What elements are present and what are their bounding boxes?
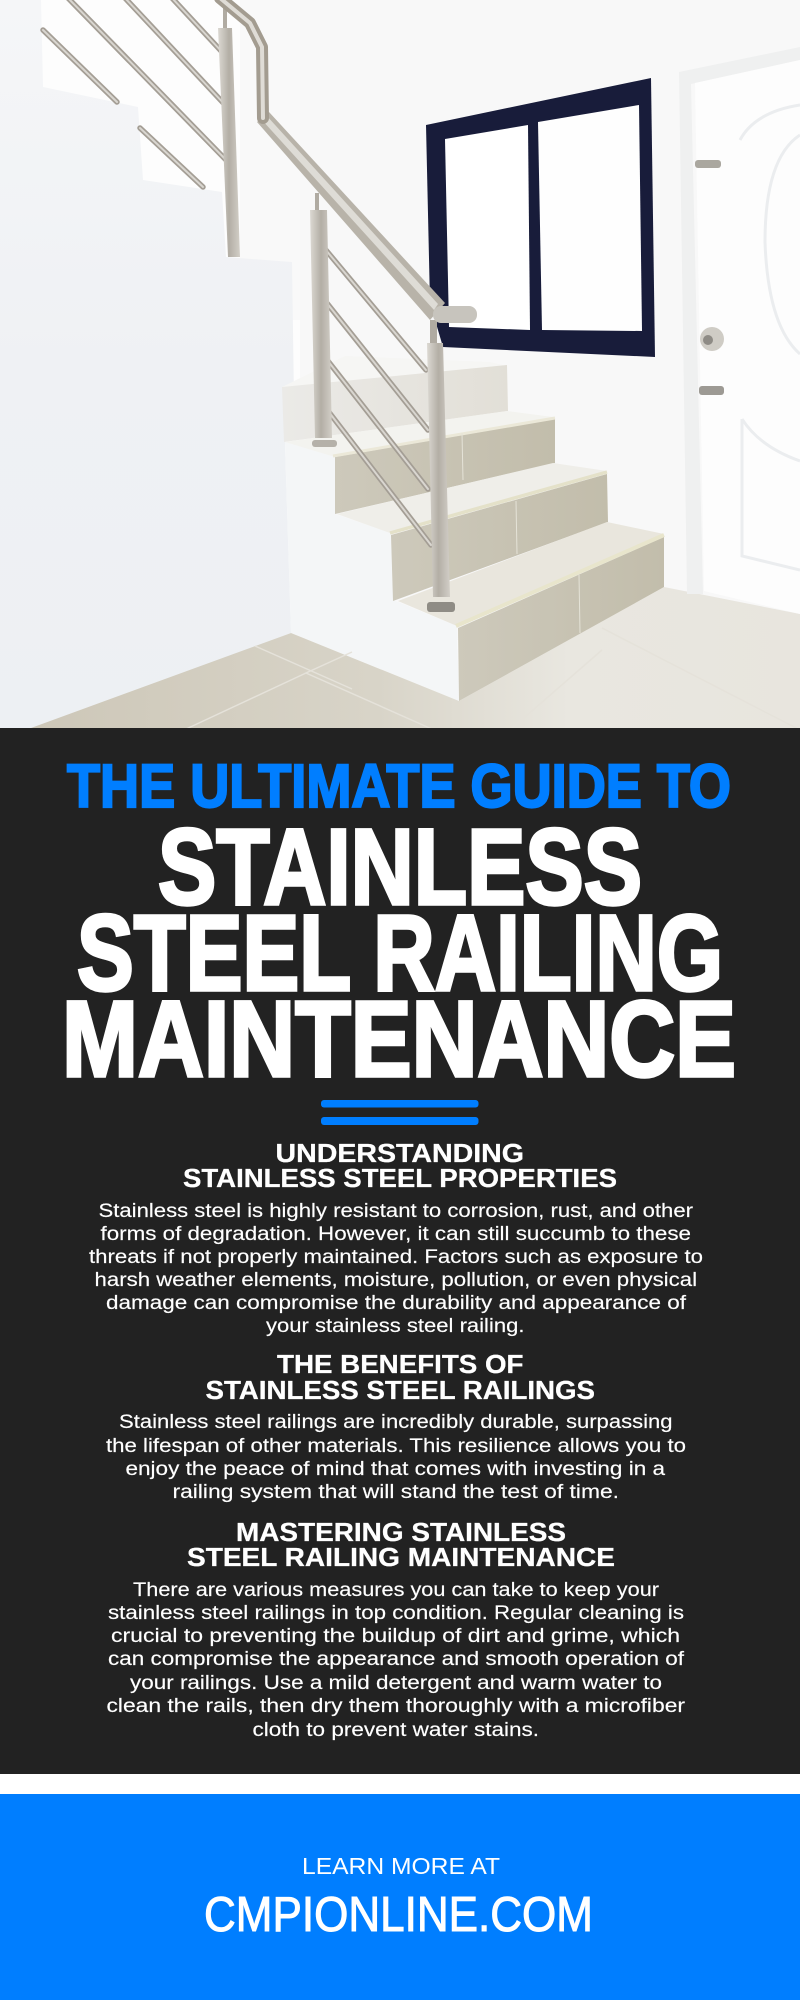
section heading: STAINLESS STEEL PROPERTIES	[183, 1163, 617, 1193]
railing posts	[218, 8, 455, 612]
window	[426, 78, 655, 357]
section body: There are various measures you can take to keep your	[133, 1580, 660, 1601]
panel: call to action footer	[0, 1794, 800, 2000]
section body: your railings. Use a mild detergent and warm water to	[130, 1673, 662, 1694]
section body	[106, 1580, 686, 1741]
section body: harsh weather elements, moisture, pollution, or even physical	[94, 1270, 697, 1291]
section heading	[206, 1349, 595, 1405]
section body: Stainless steel is highly resistant to corrosion, rust, and other	[98, 1201, 694, 1222]
section body: cloth to prevent water stains.	[252, 1720, 539, 1741]
section body: stainless steel railings in top condition. Regular cleaning is	[108, 1603, 684, 1624]
footer website: CMPIONLINE.COM	[204, 1888, 593, 1942]
section body: the lifespan of other materials. This resilience allows you to	[106, 1436, 686, 1457]
title line: Stainless: STAINLESS	[158, 806, 642, 927]
step 4	[398, 522, 664, 701]
section body: enjoy the peace of mind that comes with investing in a	[126, 1459, 666, 1480]
left stair side wall	[0, 0, 294, 730]
section body: clean the rails, then dry them thoroughly with a microfiber	[106, 1696, 686, 1717]
section heading: MASTERING STAINLESS	[236, 1517, 566, 1547]
section body: forms of degradation. However, it can still succumb to these	[100, 1224, 691, 1245]
handrail	[220, 0, 477, 323]
section heading: UNDERSTANDING	[276, 1138, 524, 1168]
section: understanding stainless steel properties	[89, 1138, 703, 1337]
floor	[31, 587, 800, 728]
panel: dark content background	[0, 728, 800, 1774]
section body	[106, 1412, 686, 1503]
title	[62, 752, 736, 1099]
section: mastering stainless steel railing maintenance	[106, 1517, 686, 1741]
section heading	[183, 1138, 617, 1193]
section body: crucial to preventing the buildup of dirt and grime, which	[111, 1626, 680, 1647]
step 1	[282, 356, 508, 442]
railing bars	[43, 0, 431, 545]
step 2	[285, 411, 555, 514]
section body: can compromise the appearance and smooth operation of	[108, 1649, 685, 1670]
floor tile lines	[184, 628, 800, 730]
section heading: STEEL RAILING MAINTENANCE	[187, 1542, 615, 1572]
title line: The Ultimate Guide To: THE ULTIMATE GUIDE TO	[67, 752, 731, 821]
photo: staircase with stainless steel railing	[0, 0, 800, 730]
section body	[89, 1201, 703, 1337]
section body: railing system that will stand the test of time.	[172, 1482, 619, 1503]
door	[679, 47, 800, 614]
accent double bar	[321, 1100, 478, 1125]
step 3	[337, 463, 608, 601]
section body: threats if not properly maintained. Factors such as exposure to	[89, 1247, 703, 1268]
stair lower side	[285, 442, 459, 701]
section body: your stainless steel railing.	[266, 1316, 524, 1337]
section: the benefits of stainless steel railings	[106, 1349, 686, 1503]
section body: damage can compromise the durability and appearance of	[106, 1293, 687, 1314]
footer label: LEARN MORE AT	[302, 1853, 500, 1879]
section body: Stainless steel railings are incredibly durable, surpassing	[119, 1412, 672, 1433]
section heading: STAINLESS STEEL RAILINGS	[206, 1375, 595, 1405]
section heading	[187, 1517, 615, 1572]
section heading: THE BENEFITS OF	[277, 1349, 524, 1379]
